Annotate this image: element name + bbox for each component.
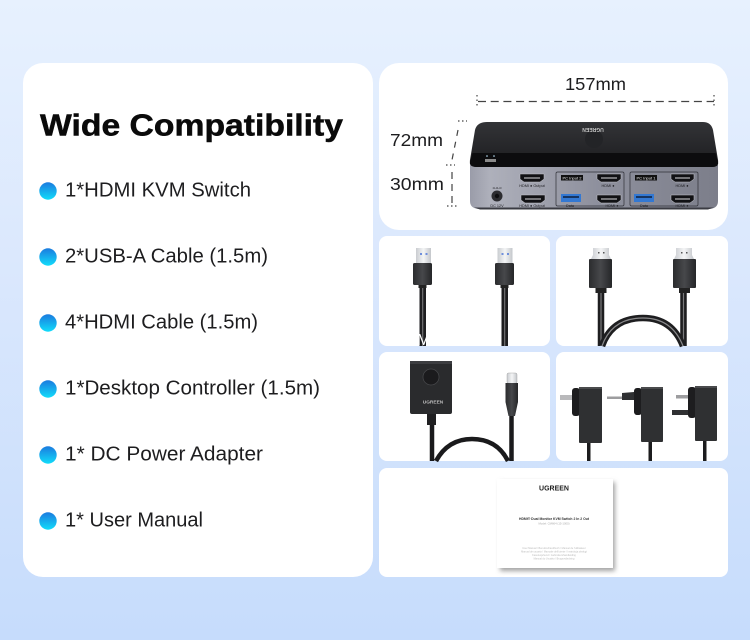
controller puck	[410, 361, 452, 425]
controller puck: UGREEN	[423, 400, 444, 406]
list item: USB-A cable: 2*USB-A Cable (1.5m)	[65, 246, 268, 268]
controller button	[585, 130, 603, 148]
width dimension label: 157mm	[565, 74, 626, 94]
black top face	[470, 122, 718, 167]
list item: HDMI KVM switch: 1*HDMI KVM Switch	[65, 180, 251, 202]
depth dimension label: 72mm	[390, 130, 443, 150]
list item: desktop controller: 1*Desktop Controller (1.5m)	[65, 378, 320, 400]
manual subtitle: Model: CM664 (15-1000)	[538, 522, 570, 526]
KVM switch device	[470, 122, 718, 210]
panel: USB-A cables	[379, 236, 550, 349]
port labels: HDMI ●	[675, 184, 689, 188]
panel: power adapters	[556, 352, 728, 461]
manual fine print: Manual de usuario / Manuale dell'utente / Instrukcja obsługi	[521, 550, 587, 554]
HDMI ports	[520, 174, 694, 203]
manual fine print: User Manual / Benutzerhandbuch / Manuel de l'utilisateur	[522, 547, 586, 550]
PC input tags	[561, 175, 657, 180]
depth and height dimension lines	[446, 121, 467, 206]
metal front body	[470, 165, 718, 209]
manual fine print: Kasutusjuhend / Gebruikershandleiding	[532, 554, 576, 557]
height dimension label: 30mm	[390, 174, 444, 194]
list item: HDMI cable: 4*HDMI Cable (1.5m)	[65, 312, 258, 334]
port labels: HDMI ●	[675, 204, 689, 208]
USB-A cable left	[413, 248, 432, 346]
panel: switch with dimensions	[379, 63, 728, 230]
port labels: Data	[640, 204, 649, 208]
PC input tags: PC Input 2	[562, 175, 582, 180]
DC jack: DC 12V	[490, 204, 504, 208]
heading: Wide Compatibility	[40, 108, 344, 142]
port labels	[519, 184, 689, 208]
panel: desktop controller	[379, 352, 550, 461]
USB-C plug	[506, 373, 518, 416]
indicator lights	[485, 155, 496, 162]
USB-A cable right	[495, 248, 514, 346]
manual page	[497, 479, 613, 568]
port labels: HDMI ● Output	[519, 204, 546, 208]
PC input tags: PC Input 1	[636, 175, 656, 180]
manual fine print: Manual do Usuário / Brugsvejledning	[534, 558, 575, 560]
panel: HDMI cables	[556, 236, 728, 346]
HDMI connector right	[673, 248, 696, 293]
adapter: US plug	[560, 387, 602, 461]
adapter: UK plug	[672, 386, 717, 461]
manual brand: UGREEN	[539, 486, 569, 492]
port labels: HDMI ●	[605, 204, 619, 208]
DC jack: o-o-o	[493, 186, 501, 190]
adapter: EU plug	[607, 387, 663, 461]
manual title: HDMI® Dual Monitor KVM Switch 2 In 2 Out	[519, 516, 590, 521]
HDMI contacts	[524, 178, 690, 200]
port labels: HDMI ●	[601, 184, 615, 188]
DC jack	[490, 186, 504, 208]
list item: DC power adapter: 1* DC Power Adapter	[65, 444, 263, 466]
port group outlines	[556, 172, 698, 206]
panel: contents list	[23, 63, 373, 577]
HDMI connector left	[589, 248, 612, 293]
port labels: HDMI ● Output	[519, 184, 546, 188]
HDMI cable loop	[601, 288, 684, 346]
controller cable	[432, 415, 512, 461]
brand mark: UGREEN	[582, 126, 604, 132]
manual fine print	[521, 547, 587, 560]
panel: user manual	[379, 468, 728, 577]
list item: user manual: 1* User Manual	[65, 510, 203, 532]
width dimension line	[477, 95, 714, 108]
paper shadow	[500, 482, 615, 571]
USB ports	[561, 194, 654, 202]
stray white glyphs over cables: M	[417, 332, 430, 349]
port labels: Data	[566, 204, 575, 208]
